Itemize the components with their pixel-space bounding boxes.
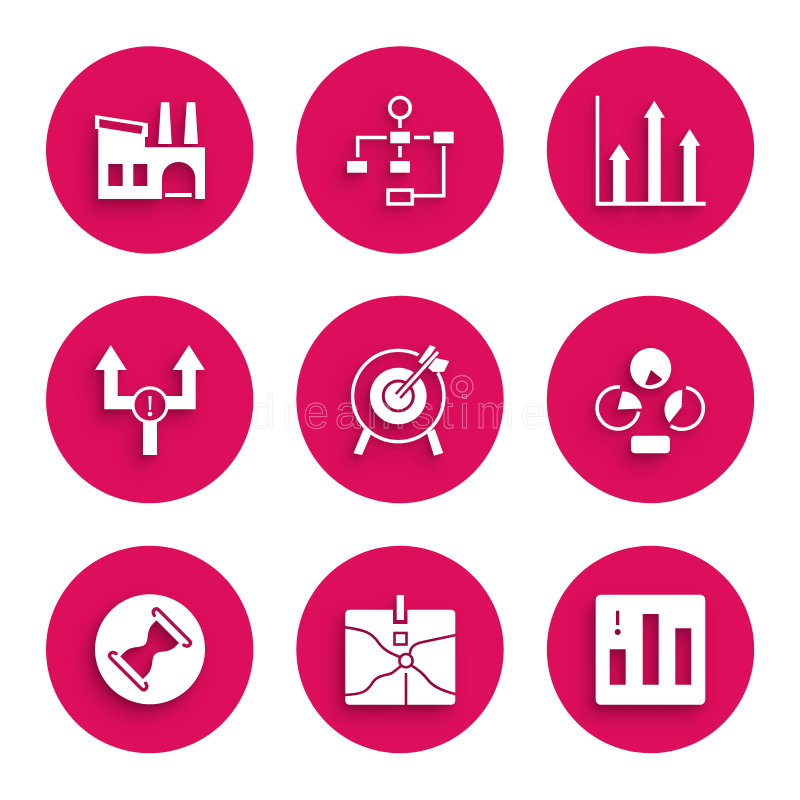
watermark overlay xyxy=(296,374,504,429)
badge circle xyxy=(46,546,253,753)
icon: rising arrows chart xyxy=(596,96,706,206)
badge circle xyxy=(46,296,253,503)
watermark overlay: dreamstime xyxy=(250,386,546,438)
icon: three pie charts xyxy=(597,348,703,453)
badge circle xyxy=(296,46,504,254)
panel: factory xyxy=(46,46,253,254)
hourglass brackets xyxy=(108,608,192,691)
panel: pie charts xyxy=(547,296,754,503)
icon: road map with pin xyxy=(345,595,455,705)
panel: flowchart xyxy=(296,46,504,254)
icon: hourglass in disc xyxy=(78,594,207,724)
badge circle xyxy=(547,46,754,254)
panel: hourglass xyxy=(46,546,253,753)
icon: target with arrow xyxy=(353,345,449,456)
badge circle xyxy=(296,296,504,503)
icon: factory xyxy=(95,102,205,199)
badge circle xyxy=(547,546,754,753)
icon: flowchart xyxy=(347,98,454,204)
panel: fork arrows xyxy=(46,296,253,503)
badge circle xyxy=(296,546,504,753)
icon: bar chart card xyxy=(596,595,705,705)
panel: map xyxy=(296,546,504,753)
icon: fork arrows with warning xyxy=(95,345,205,455)
watermark: dreamstime xyxy=(250,386,546,438)
panel: rising arrows chart xyxy=(547,46,754,254)
badge circle xyxy=(547,296,754,503)
panel: bar chart xyxy=(547,546,754,753)
badge circle xyxy=(46,46,253,254)
panel: target xyxy=(296,296,504,503)
